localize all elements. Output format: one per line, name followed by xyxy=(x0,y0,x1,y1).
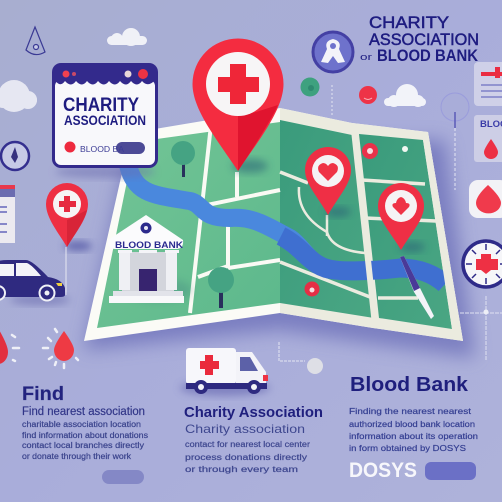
subheading: find: Find nearest association xyxy=(22,406,145,418)
icon: blood drop left xyxy=(0,328,8,364)
body: blood bank: information about its operation xyxy=(349,432,478,441)
bank label: BLOOD BANK xyxy=(115,240,183,251)
right card with cross xyxy=(474,62,502,106)
sign window dots xyxy=(62,69,148,79)
title: ASSOCIATION xyxy=(369,30,479,49)
icon: red dot xyxy=(359,86,377,104)
icon: cloud top xyxy=(107,28,147,46)
left red pin with cross xyxy=(46,183,92,295)
sign heading: CHARITY xyxy=(63,95,139,116)
map: green middle panel xyxy=(280,120,374,318)
title xyxy=(360,13,479,65)
text block: charity association xyxy=(184,404,323,474)
icon: tree upper xyxy=(171,141,195,177)
icon: translucent location circle xyxy=(441,93,469,190)
body: find: contact local branches directly xyxy=(22,441,144,450)
body: blood bank: in form obtained by DOSYS xyxy=(349,443,466,453)
icon: cloud right xyxy=(384,84,426,107)
blood bank building xyxy=(108,215,192,303)
right card blood xyxy=(474,115,502,162)
heart pin middle xyxy=(305,147,351,217)
body: charity association: contact for nearest local center xyxy=(185,440,310,449)
heading: charity association: Charity Association xyxy=(184,404,323,421)
body: blood bank: Finding the nearest nearest xyxy=(349,406,472,416)
bank roof xyxy=(108,215,183,249)
left list card xyxy=(0,185,15,243)
icon: cloud left xyxy=(0,80,37,112)
map: roads xyxy=(190,125,280,313)
subheading: charity association: Charity association xyxy=(185,422,305,436)
map: river xyxy=(128,165,445,284)
body: blood bank: authorized blood bank location xyxy=(349,420,475,429)
text block: find xyxy=(22,384,148,461)
body: charity association: or through every team xyxy=(185,465,298,474)
bank body xyxy=(122,252,174,294)
charity association sign xyxy=(52,63,158,178)
map shadow xyxy=(84,140,475,358)
map: white and cream sheet xyxy=(84,108,463,341)
heading: find: Find xyxy=(22,384,64,405)
right card large drop xyxy=(469,180,502,218)
text block: blood bank xyxy=(349,374,478,482)
sign blood bank button: BLOOD BA xyxy=(80,144,124,154)
icon: ribbon badge xyxy=(313,32,353,72)
node lines xyxy=(460,296,502,360)
body: find xyxy=(22,420,148,461)
map: centre fold xyxy=(354,130,375,325)
map: green right panel xyxy=(359,134,452,329)
cross xyxy=(218,64,259,104)
body: blood bank xyxy=(349,406,478,453)
icon: compass circle xyxy=(1,142,29,170)
heart pin right xyxy=(378,183,425,252)
body: find: or donate through their work xyxy=(22,452,132,461)
icon: blood drop center xyxy=(12,329,78,368)
car xyxy=(0,260,70,305)
dashed connector with node xyxy=(279,342,323,374)
big red pin with cross xyxy=(192,38,284,173)
find button xyxy=(102,470,144,484)
map: green left panel xyxy=(97,122,280,328)
body: charity association xyxy=(185,440,310,474)
icon: tree lower xyxy=(208,267,234,308)
body: charity association: process donations directly xyxy=(185,453,307,462)
small pin dots on map xyxy=(304,143,408,296)
title: CHARITY xyxy=(369,13,449,32)
heading: blood bank: Blood Bank xyxy=(350,374,469,396)
icon: pen on map xyxy=(400,256,434,319)
map xyxy=(84,108,463,341)
icon: clock with cross xyxy=(463,241,502,287)
icon: pen nib outline xyxy=(26,27,45,55)
body: find: find information about donations xyxy=(22,431,148,440)
sign subheading: ASSOCIATION xyxy=(64,113,146,128)
body: find: charitable association location xyxy=(22,420,141,429)
title: BLOOD BANK xyxy=(377,47,478,65)
title: or xyxy=(360,52,372,62)
icon: ambulance xyxy=(180,348,270,396)
map: right border xyxy=(423,132,463,341)
icon: green dot xyxy=(300,78,332,116)
DOSYS brand: DOSYS xyxy=(349,459,417,482)
map: cream roads xyxy=(280,172,436,298)
dosys button xyxy=(425,462,476,480)
